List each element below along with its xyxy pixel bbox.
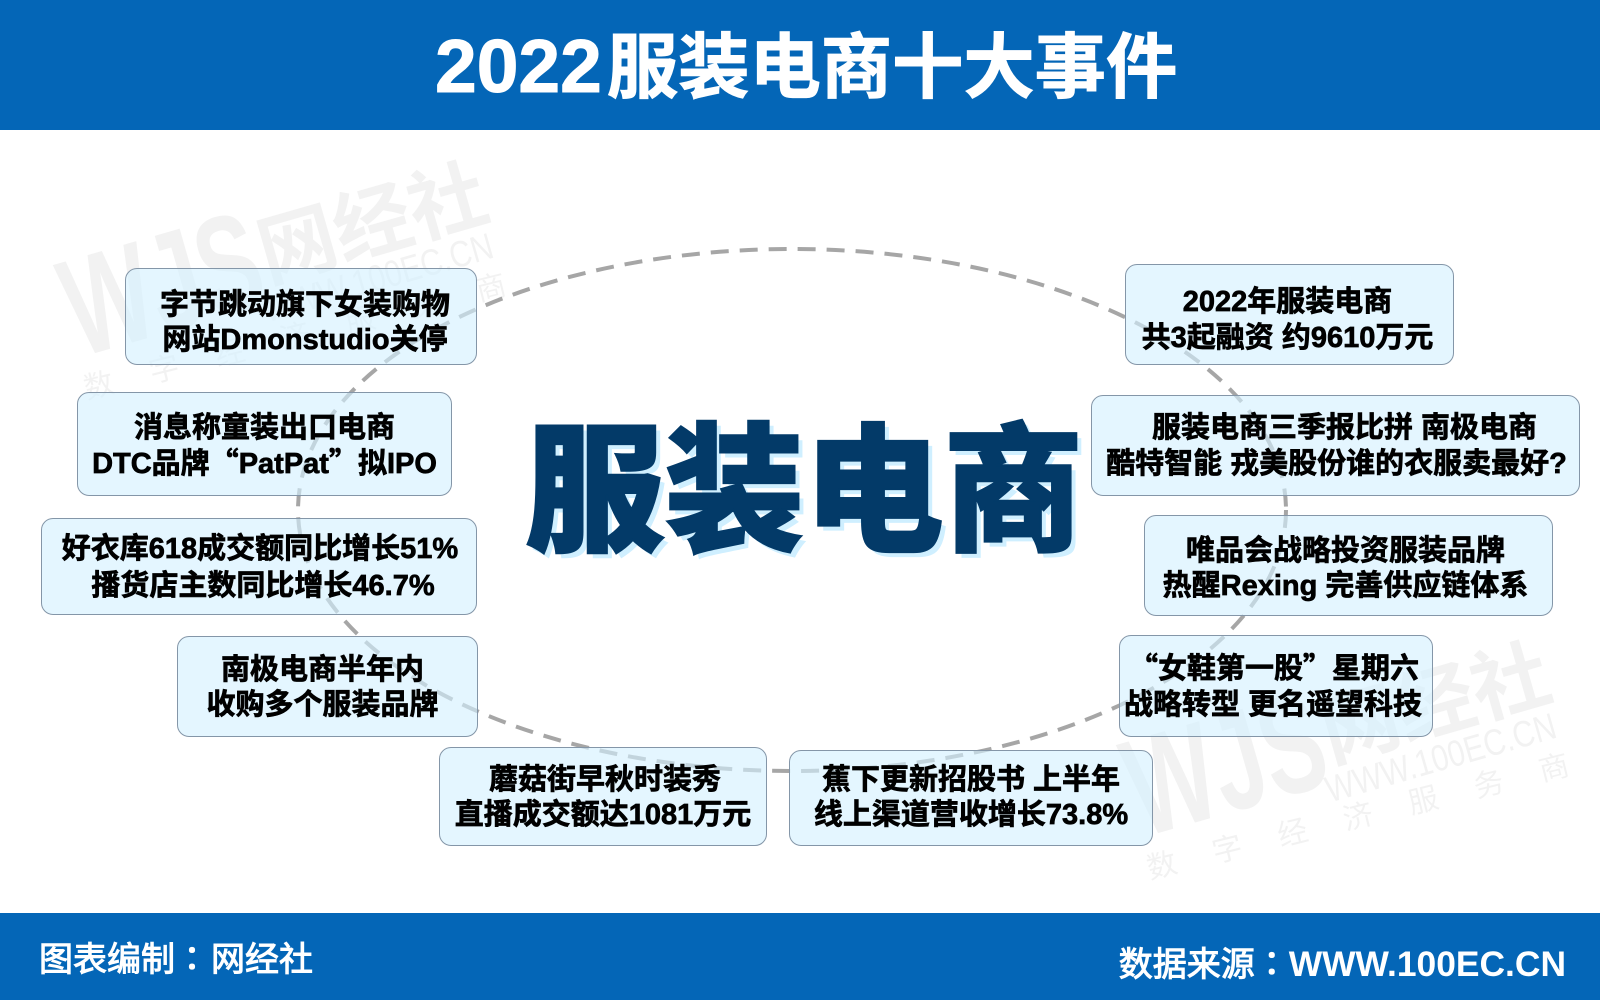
watermark: top left: WWW.100EC.CN <box>258 225 498 330</box>
event box 8: 热醒Rexing 完善供应链体系 <box>1163 570 1528 602</box>
title: 2022服装电商十大事件 <box>435 24 1177 108</box>
event box 6: 线上渠道营收增长73.8% <box>814 799 1128 831</box>
event box 5 <box>439 747 767 846</box>
watermark: top left: 网经社 <box>248 149 497 298</box>
event box 5: 蘑菇街早秋时装秀 <box>489 764 721 796</box>
event box 7: 战略转型 更名遥望科技 <box>1124 688 1422 720</box>
header bar <box>0 0 1600 130</box>
event box 3: 播货店主数同比增长46.7% <box>91 570 435 602</box>
event box 1 <box>125 268 477 365</box>
watermark: bottom right: 网经社 <box>1311 629 1560 778</box>
watermark: top left: 数字经济服务商 <box>81 269 510 406</box>
footer credit: 图表编制：网经社 <box>39 932 313 981</box>
event box 8 <box>1144 515 1553 616</box>
event box 8: 唯品会战略投资服装品牌 <box>1186 534 1505 566</box>
event box 1: 字节跳动旗下女装购物 <box>160 288 450 320</box>
event box 9: 酷特智能 戎美股份谁的衣服卖最好? <box>1106 448 1567 480</box>
footer bar <box>0 913 1600 1000</box>
event box 7: “女鞋第一股”星期六 <box>1129 644 1419 686</box>
event box 10: 2022年服装电商 <box>1183 286 1392 318</box>
event box 10: 共3起融资 约9610万元 <box>1142 322 1433 354</box>
event box 10 <box>1125 264 1454 365</box>
event box 6 <box>789 750 1153 846</box>
event box 4: 南极电商半年内 <box>221 654 424 686</box>
event box 2: 消息称童装出口电商 <box>134 412 395 444</box>
event box 5: 直播成交额达1081万元 <box>455 798 751 830</box>
event box 3 <box>41 518 477 615</box>
footer source: 数据来源：WWW.100EC.CN <box>1119 937 1566 986</box>
event box 2: DTC品牌“PatPat”拟IPO <box>92 440 437 482</box>
event box 4: 收购多个服装品牌 <box>206 688 438 720</box>
event box 1: 网站Dmonstudio关停 <box>162 324 448 356</box>
event box 4 <box>177 636 478 737</box>
center heading: 服装电商 <box>525 414 1083 570</box>
watermark: bottom right: 数字经济服务商 <box>1144 749 1573 886</box>
event box 9: 服装电商三季报比拼 南极电商 <box>1152 412 1537 444</box>
event box 6: 蕉下更新招股书 上半年 <box>822 764 1120 796</box>
event box 9 <box>1091 395 1580 496</box>
event box 3: 好衣库618成交额同比增长51% <box>62 532 458 564</box>
event box 7 <box>1119 635 1433 737</box>
watermark: bottom right: WJS <box>1107 660 1343 867</box>
event box 2 <box>77 392 452 496</box>
watermark: top left: WJS <box>44 180 280 387</box>
